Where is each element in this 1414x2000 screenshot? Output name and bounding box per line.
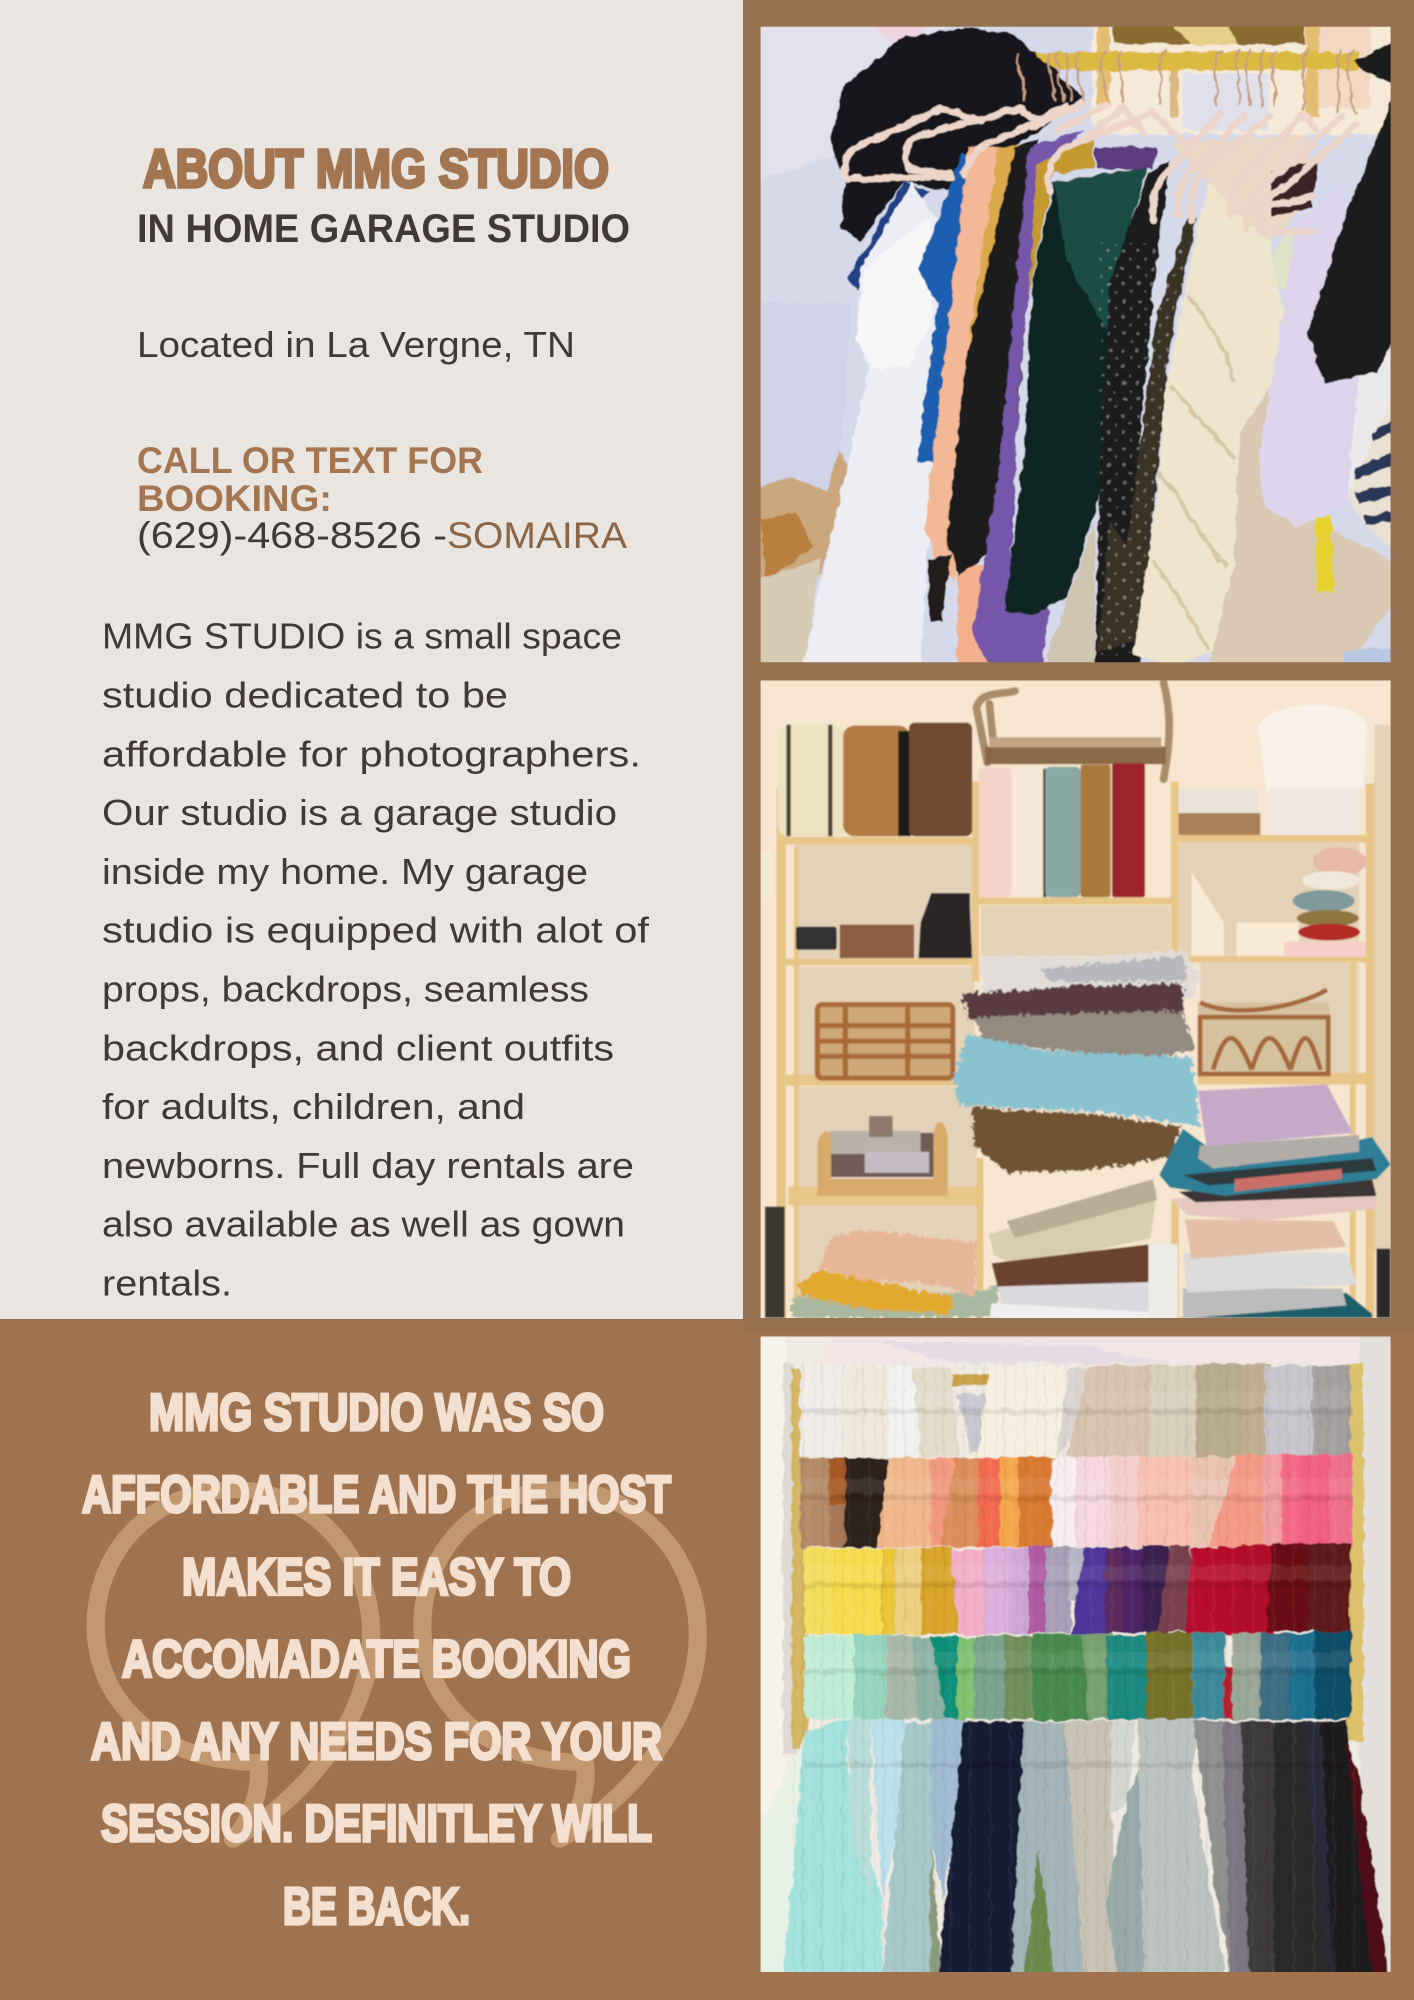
- rolled backdrops: [989, 1179, 1178, 1318]
- testimonial quote text: BE BACK.: [283, 1878, 470, 1936]
- booking block: SOMAIRA: [447, 515, 627, 556]
- body paragraph: affordable for photographers.: [102, 733, 641, 774]
- white dress: [802, 182, 938, 668]
- photo: rainbow rack of knotted wraps: [760, 1336, 1391, 1972]
- testimonial quote text: AFFORDABLE AND THE HOST: [82, 1466, 671, 1524]
- testimonial quote text: MMG STUDIO WAS SO: [149, 1384, 604, 1442]
- testimonial quote text: MAKES IT EASY TO: [182, 1548, 571, 1606]
- lavender tulle: [1258, 182, 1372, 527]
- wrap row: long blues, greys and blacks: [753, 1719, 1389, 1979]
- panel: about text: [0, 0, 743, 1319]
- chunky knits: [792, 1230, 998, 1318]
- rattan baskets: [815, 990, 1329, 1080]
- small basket with fabrics: [817, 1116, 948, 1196]
- fuzzy white prop and box: [1179, 705, 1367, 835]
- panel: testimonial: [0, 1319, 743, 2000]
- body paragraph: backdrops, and client outfits: [102, 1027, 614, 1068]
- pampas grass: [753, 451, 847, 668]
- subheading: in home garage studio: IN HOME GARAGE STUDIO: [137, 207, 630, 251]
- pink velvet hangers: [844, 104, 1355, 232]
- black lamp reflector and small props: [796, 893, 972, 958]
- body paragraph: inside my home. My garage: [102, 851, 588, 892]
- shelf back shadows: [796, 725, 1391, 1314]
- bolster cushions: [979, 763, 1145, 897]
- icon: closing quotation marks: [96, 1490, 698, 1839]
- body paragraph: props, backdrops, seamless: [102, 968, 589, 1010]
- booking block: [137, 440, 627, 556]
- tan skirt: [1209, 347, 1398, 668]
- wooden barrels: [778, 723, 972, 837]
- cream neckline and dark garment behind hangers: [1170, 134, 1312, 243]
- heading: about MMG studio: ABOUT MMG STUDIO: [143, 139, 609, 199]
- testimonial quote text: ACCOMADATE BOOKING: [122, 1630, 631, 1688]
- body paragraph: studio dedicated to be: [102, 674, 508, 716]
- booking block: CALL OR TEXT FOR: [137, 440, 483, 481]
- body paragraph: Our studio is a garage studio: [102, 792, 617, 833]
- testimonial quote text: AND ANY NEEDS FOR YOUR: [91, 1713, 662, 1771]
- testimonial quote text: [82, 1384, 671, 1936]
- body paragraph: studio is equipped with alot of: [102, 910, 650, 951]
- sequin black gown: [1095, 160, 1170, 668]
- striped knit: [1346, 386, 1398, 550]
- yellow tag: [1315, 516, 1333, 593]
- fabric folds and knots: [792, 1363, 1355, 1979]
- gold rack frame: [792, 1363, 1364, 1747]
- body paragraph: newborns. Full day rentals are: [102, 1145, 634, 1186]
- driftwood frame: [976, 683, 1169, 779]
- wrap row: mints, greens and teals: [804, 1631, 1351, 1720]
- wrap row: browns, oranges and pinks: [800, 1454, 1353, 1547]
- body paragraph: also available as well as gown: [102, 1204, 625, 1245]
- wooden shelf frame: [777, 781, 1374, 1318]
- tripod and dark case: [761, 851, 1391, 1318]
- booking block: BOOKING:: [137, 478, 332, 519]
- body paragraph: [102, 616, 650, 1304]
- body paragraph: rentals.: [102, 1262, 232, 1304]
- folded fabric stacks: [1159, 1084, 1391, 1318]
- location text: Located in La Vergne, TN: [137, 324, 575, 365]
- black hat: [830, 27, 1084, 243]
- testimonial quote text: SESSION. DEFINITLEY WILL: [101, 1795, 652, 1853]
- wrap row: whites and neutrals: [800, 1363, 1351, 1457]
- photo: clothing rack with gowns on pink hangers: [760, 26, 1391, 662]
- body paragraph: MMG STUDIO is a small space: [102, 616, 622, 657]
- body paragraph: for adults, children, and: [102, 1086, 525, 1127]
- fur blankets: [953, 950, 1200, 1173]
- booking block: (629)-468-8526 -: [137, 515, 447, 556]
- stacked small pillows: [1284, 847, 1367, 957]
- cream ruffled dress: [1133, 182, 1290, 668]
- wrap row: yellows, lilacs, purples and reds: [804, 1543, 1351, 1635]
- photo: wooden shelves with props, fur blankets and backdrops: [760, 680, 1391, 1318]
- black tee: [1308, 82, 1398, 384]
